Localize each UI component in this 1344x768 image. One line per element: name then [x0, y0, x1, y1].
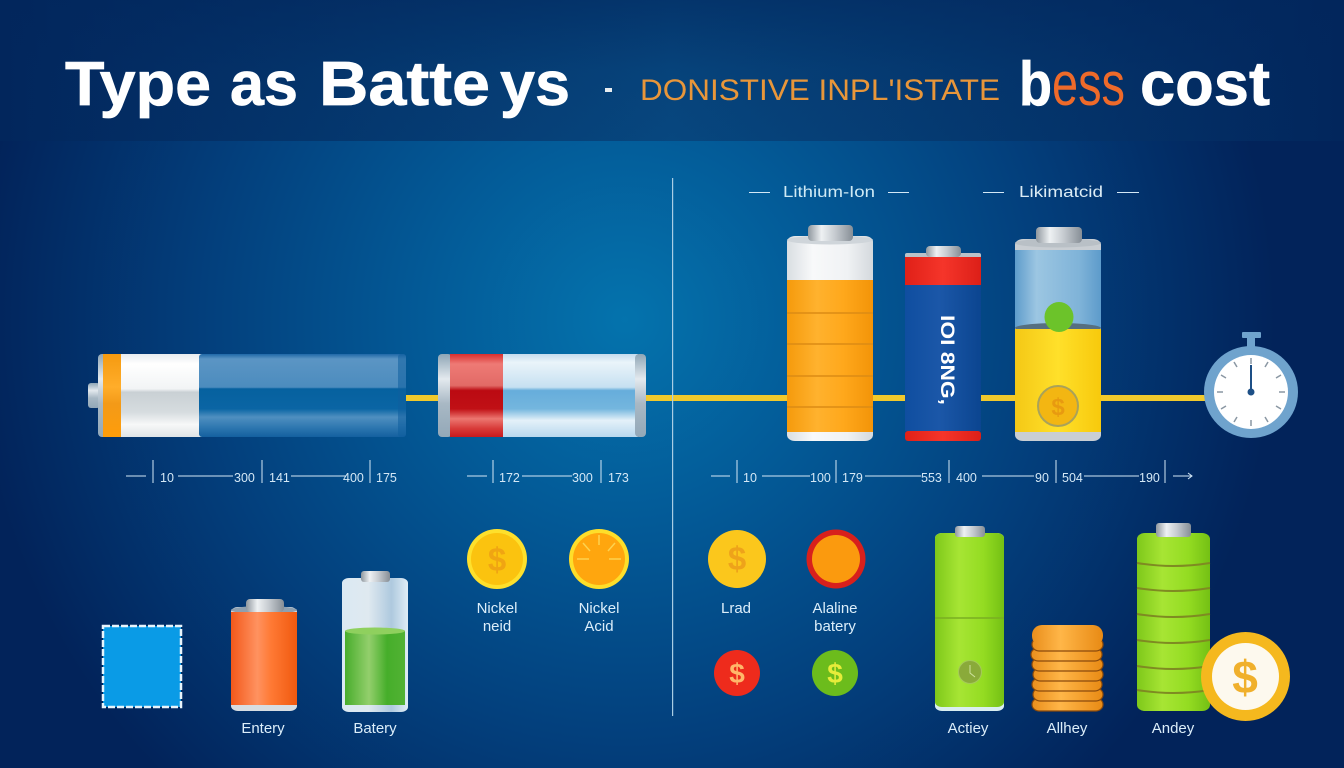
coin: Lead: $ [728, 540, 746, 577]
scale: right batteries: 10 [743, 471, 757, 485]
coin: red dollar: $ [729, 658, 745, 689]
coin: green dollar [812, 650, 858, 696]
scale: right batteries [711, 460, 1192, 485]
scale: left batteries: 300 [234, 471, 255, 485]
battery: yellow with coin [1015, 227, 1101, 441]
icon: dollar coin: $ [1051, 394, 1065, 421]
battery: green, Actiey [935, 526, 1004, 737]
heading: bess cost: b [1019, 50, 1052, 119]
icon: large dollar coin: $ [1232, 651, 1258, 703]
gauge: Nickel Acid: Acid [584, 618, 614, 635]
label: Actiey [948, 720, 989, 737]
label: Lithium-Ion: Lithium-Ion [783, 184, 875, 201]
battery: red and blue: IOI 8NG, [936, 315, 957, 405]
coin: Lead [708, 530, 766, 617]
heading: bess cost: ess [1052, 50, 1125, 119]
scale: right batteries: 400 [956, 471, 977, 485]
battery: green, Batery [342, 571, 408, 737]
label: Batery [353, 720, 397, 737]
battery: red and blue [905, 246, 981, 441]
scale: right batteries: 100 [810, 471, 831, 485]
coin stack: Allhey [1031, 625, 1103, 737]
gauge: Alaline batery [806, 530, 866, 635]
heading: Type as Batteys: as [230, 50, 298, 119]
scale: left batteries: 300 [572, 471, 593, 485]
heading: bess cost: cost [1140, 50, 1270, 119]
scale: right batteries: 179 [842, 471, 863, 485]
scale: left batteries: 10 [160, 471, 174, 485]
coin: Nickel neid: $ [488, 541, 506, 578]
scale: right batteries: 90 [1035, 471, 1049, 485]
battery: ringed green, Andey [1137, 523, 1210, 737]
gauge: Nickel Acid [569, 529, 629, 635]
coin: green dollar: $ [827, 658, 843, 689]
label: Lrad [721, 600, 751, 617]
horizontal battery: white and blue [88, 354, 406, 437]
subtitle: DONISTIVE INPL'ISTATE [640, 74, 1000, 107]
scale: left batteries: 172 [499, 471, 520, 485]
icon: small clock [958, 660, 982, 684]
label: Allhey [1047, 720, 1088, 737]
axis: yellow timeline [404, 395, 1206, 401]
scale: right batteries: 190 [1139, 471, 1160, 485]
horizontal battery: red and clear [438, 354, 646, 437]
icon: large dollar coin [1201, 632, 1290, 721]
label: Nickel [579, 600, 619, 617]
coin: red dollar [714, 650, 760, 696]
label: Nickel [477, 600, 517, 617]
heading: Type as Batteys: Batte [319, 50, 490, 119]
heading: bess cost [1019, 50, 1270, 119]
scale: right batteries: 553 [921, 471, 942, 485]
scale: left batteries: 141 [269, 471, 290, 485]
battery: orange lithium-ion [787, 225, 873, 441]
label: Alaline [812, 600, 858, 617]
scale: left batteries: 175 [376, 471, 397, 485]
label: Likimatcid: Likimatcid [1019, 184, 1103, 201]
gauge: Alaline batery: batery [814, 618, 856, 635]
label: Andey [1152, 720, 1195, 737]
title [65, 50, 1270, 119]
scale: left batteries [126, 460, 629, 485]
coin: Nickel neid [467, 529, 527, 635]
heading: Type as Batteys: Type [65, 50, 211, 119]
heading: Type as Batteys [65, 50, 570, 119]
icon: dollar coin [1038, 386, 1078, 426]
heading: Type as Batteys: ys [500, 50, 570, 119]
battery: orange, Entery [231, 599, 297, 737]
marker: green ball [1044, 302, 1074, 332]
scale: left batteries: 173 [608, 471, 629, 485]
icon: stopwatch [1204, 332, 1298, 438]
scale: right batteries: 504 [1062, 471, 1083, 485]
coin: Nickel neid: neid [483, 618, 511, 635]
label: Entery [241, 720, 285, 737]
swatch: blue square [103, 626, 181, 707]
scale: left batteries: 400 [343, 471, 364, 485]
